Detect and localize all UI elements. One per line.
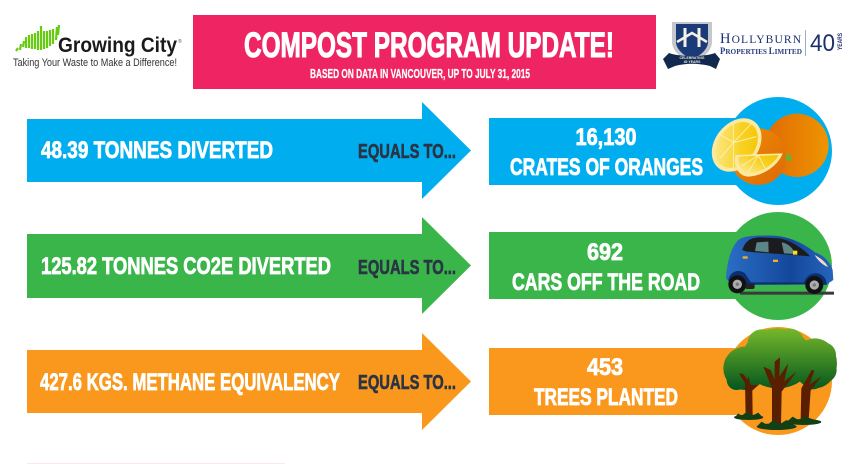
row 3: trees result (489, 327, 837, 435)
result text: 692 (587, 239, 623, 266)
icon: shield: CELEBRATING (679, 56, 705, 60)
row 1: tonnes diverted arrow (27, 102, 471, 199)
result text: 16,130 (576, 124, 636, 151)
row 2: CO2e arrow (27, 217, 471, 314)
row 2: cars result: CARS OFF THE ROAD (512, 269, 700, 296)
row 2 equals to: EQUALS TO... (358, 257, 456, 279)
company name: HOLLYBURN (720, 31, 802, 47)
title: COMPOST PROGRAM UPDATE! (244, 26, 614, 65)
logo: Growing City (13, 25, 182, 69)
icon: green city skyline bars (16, 25, 59, 51)
icon: shield: 40 YEARS (684, 60, 701, 64)
row 1: oranges result (489, 97, 832, 205)
row 2 label: 125.82 TONNES CO2E DIVERTED (41, 253, 331, 280)
company subtitle: PROPERTIES LIMITED (720, 46, 803, 56)
icon: three trees (723, 328, 837, 430)
icon: blue car (726, 235, 834, 295)
years vertical label: YEARS (838, 33, 844, 50)
wordmark: Growing City (58, 34, 177, 57)
icon: shield (663, 22, 720, 69)
logo: Hollyburn Properties (663, 22, 844, 69)
row 1: oranges result: CRATES OF ORANGES (510, 154, 703, 181)
row 3 equals to: EQUALS TO... (358, 372, 456, 394)
row 1 label: 48.39 TONNES DIVERTED (41, 137, 273, 164)
row 3: trees result: TREES PLANTED (534, 384, 678, 411)
result text: 453 (587, 354, 623, 381)
tagline: Taking Your Waste to Make a Difference! (13, 57, 177, 69)
title banner (193, 15, 656, 89)
icon: oranges (702, 109, 829, 185)
row 3 label: 427.6 KGS. METHANE EQUIVALENCY (40, 369, 340, 396)
row 3: methane arrow (27, 333, 471, 430)
row 2: cars result (489, 212, 834, 320)
row 1 equals to: EQUALS TO... (358, 141, 456, 163)
subtitle: BASED ON DATA IN VANCOUVER, UP TO JULY 31, 2015 (310, 67, 530, 81)
registered mark: ® (178, 38, 182, 45)
40 years mark: 40 (810, 30, 835, 57)
